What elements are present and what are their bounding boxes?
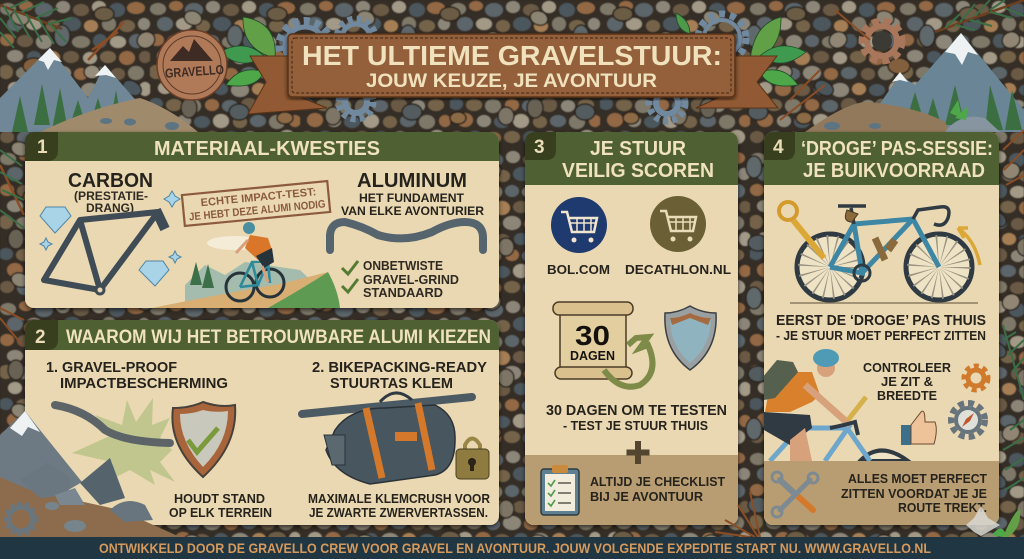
icon: bol.com cart bbox=[551, 197, 607, 253]
stamp: echte impact-test: ECHTE IMPACT-TEST: bbox=[200, 186, 317, 209]
dry fit text: EERST DE ‘DROGE’ PAS THUIS bbox=[776, 312, 986, 329]
rider with bike bbox=[762, 349, 908, 461]
checklist text: BIJ JE AVONTUUR bbox=[590, 489, 704, 504]
carbon label: CARBON bbox=[68, 170, 153, 192]
panel 3 header bbox=[525, 132, 738, 185]
checklist: STANDAARD bbox=[363, 285, 443, 300]
icon: orange gear bbox=[964, 366, 988, 390]
point 1 caption: OP ELK TERREIN bbox=[169, 506, 272, 520]
point 1 heading: IMPACTBESCHERMING bbox=[60, 375, 228, 392]
panel 1 header: MATERIAAL-KWESTIES bbox=[154, 138, 380, 160]
stamp: echte impact-test: JE HEBT DEZE ALUMI NODIG bbox=[189, 198, 326, 223]
title line 2: JOUW KEUZE, JE AVONTUUR bbox=[366, 71, 657, 92]
dry fit text: - JE STUUR MOET PERFECT ZITTEN bbox=[776, 328, 986, 343]
icon: handlebar bbox=[330, 222, 483, 250]
icon: 30 dagen scroll: DAGEN bbox=[570, 349, 615, 363]
icon: 30 dagen scroll bbox=[553, 302, 633, 379]
mountain and rocks bottom left bbox=[0, 411, 180, 537]
icon: clipboard checklist bbox=[541, 465, 579, 515]
checklist bbox=[342, 258, 459, 300]
footer text: ONTWIKKELD DOOR DE GRAVELLO CREW VOOR GRAVEL EN AVONTUUR. JOUW VOLGENDE EXPEDITIE START NU. WWW.GRAVELLO.NL bbox=[99, 540, 931, 556]
icon: crossed tools bbox=[772, 472, 818, 517]
panel 3: je stuur veilig scoren bbox=[525, 132, 738, 525]
leaves left of title bbox=[220, 17, 275, 86]
checklist: GRAVEL-GRIND bbox=[363, 272, 459, 287]
point 2 heading bbox=[312, 359, 487, 392]
icon: 30 dagen scroll: 30 bbox=[575, 320, 610, 351]
panel 2: waarom alumi bbox=[25, 320, 499, 525]
point 2 heading: STUURTAS KLEM bbox=[330, 375, 453, 392]
plus sign bbox=[626, 441, 650, 464]
panel 4 header: 4 bbox=[773, 137, 784, 158]
aluminum label: HET FUNDAMENT bbox=[359, 191, 465, 205]
30 dagen text: 30 DAGEN OM TE TESTEN bbox=[546, 402, 727, 419]
panel 3 header: JE STUUR bbox=[590, 138, 687, 160]
panel 2 header bbox=[25, 320, 499, 350]
30 dagen text bbox=[546, 402, 727, 433]
checklist text bbox=[590, 474, 725, 504]
icon: return arrow bbox=[604, 337, 652, 387]
ribbon tails bbox=[248, 56, 778, 114]
band text: ZITTEN VOORDAT JE JE bbox=[841, 486, 987, 501]
carbon label: (PRESTATIE- bbox=[74, 191, 148, 203]
icon: shield with check bbox=[172, 402, 235, 477]
title line 1: HET ULTIEME GRAVELSTUUR: bbox=[302, 40, 722, 71]
shop labels bbox=[547, 263, 731, 277]
panel 4 header bbox=[764, 132, 999, 185]
pine needles bottom bbox=[715, 492, 760, 537]
mountains top right bbox=[805, 33, 1024, 132]
point 1 caption bbox=[169, 492, 272, 520]
icon: handlebar bag bbox=[302, 393, 472, 484]
panel 1 header bbox=[25, 132, 499, 161]
point 1 caption: HOUDT STAND bbox=[174, 492, 265, 506]
icon: shield bbox=[665, 306, 716, 370]
icon: gravel bike bbox=[779, 202, 980, 303]
title banner bbox=[288, 34, 735, 97]
copper badge logo bbox=[157, 30, 227, 100]
dry fit text bbox=[776, 312, 986, 343]
icon: padlock bbox=[456, 438, 489, 479]
aluminum label: ALUMINUM bbox=[357, 170, 467, 192]
aluminum label bbox=[341, 170, 484, 218]
panel 4: droge pas-sessie bbox=[762, 132, 999, 525]
icon: bent handlebar bbox=[55, 405, 170, 443]
shop labels: BOL.COM bbox=[547, 263, 610, 277]
carbon label: DRANG) bbox=[86, 203, 134, 215]
lower band panel 4 bbox=[764, 461, 999, 525]
cyclist scene bbox=[152, 222, 340, 308]
check fit text: CONTROLEER bbox=[863, 360, 952, 375]
panel 2 header: 2 bbox=[35, 327, 46, 348]
pine branch top left bbox=[0, 0, 124, 60]
copper badge logo: GRAVELLO bbox=[165, 62, 224, 81]
icon: thumbs up bbox=[901, 411, 936, 445]
panel 3 header: 3 bbox=[534, 137, 545, 158]
impact burst bbox=[72, 398, 175, 485]
lower band panel 3 bbox=[525, 455, 738, 525]
panel 1 header: 1 bbox=[37, 137, 48, 158]
stamp: echte impact-test bbox=[182, 181, 330, 226]
leaves right of title bbox=[676, 13, 806, 86]
icon: carbon frame bbox=[44, 210, 165, 294]
point 2 caption bbox=[308, 492, 490, 520]
side pine right bbox=[1003, 130, 1024, 490]
sparkle and leaf corner bbox=[966, 506, 1020, 537]
aluminum label: VAN ELKE AVONTURIER bbox=[341, 204, 484, 218]
band text: ALLES MOET PERFECT bbox=[848, 471, 987, 486]
band text bbox=[841, 471, 987, 515]
point 2 heading: 2. BIKEPACKING-READY bbox=[312, 359, 487, 376]
point 1 heading: 1. GRAVEL-PROOF bbox=[46, 359, 177, 376]
gears behind title bbox=[279, 14, 746, 121]
band text: ROUTE TREKT. bbox=[898, 500, 987, 515]
checklist text: ALTIJD JE CHECKLIST bbox=[590, 474, 725, 489]
30 dagen text: - TEST JE STUUR THUIS bbox=[563, 418, 708, 433]
point 2 caption: MAXIMALE KLEMCRUSH VOOR bbox=[308, 492, 490, 506]
icon: decathlon cart bbox=[650, 196, 706, 252]
icon: compass gear bbox=[951, 403, 985, 437]
point 1 heading bbox=[46, 359, 228, 392]
pine branch left side bbox=[0, 150, 24, 345]
panel 1: materiaal-kwesties bbox=[25, 132, 499, 308]
check fit text bbox=[863, 360, 952, 403]
panel 4 header: ‘DROGE’ PAS-SESSIE: bbox=[801, 138, 993, 160]
panel 2 header: WAAROM WIJ HET BETROUWBARE ALUMI KIEZEN bbox=[66, 327, 491, 348]
rusty gear top right bbox=[862, 21, 902, 61]
shop labels: DECATHLON.NL bbox=[625, 263, 731, 277]
mountains top left bbox=[0, 48, 198, 132]
point 2 caption: JE ZWARTE ZWERVERTASSEN. bbox=[309, 506, 488, 520]
panel 3 header: VEILIG SCOREN bbox=[562, 160, 714, 182]
footer bar bbox=[0, 537, 1024, 559]
icon: diamonds and sparkles bbox=[40, 191, 181, 286]
panel 4 header: JE BUIKVOORRAAD bbox=[803, 160, 985, 182]
checklist: ONBETWISTE bbox=[363, 258, 443, 273]
pine branch top right bbox=[780, 0, 1024, 120]
check fit text: BREEDTE bbox=[877, 388, 937, 403]
carbon label bbox=[68, 170, 153, 215]
check fit text: JE ZIT & bbox=[881, 374, 933, 389]
